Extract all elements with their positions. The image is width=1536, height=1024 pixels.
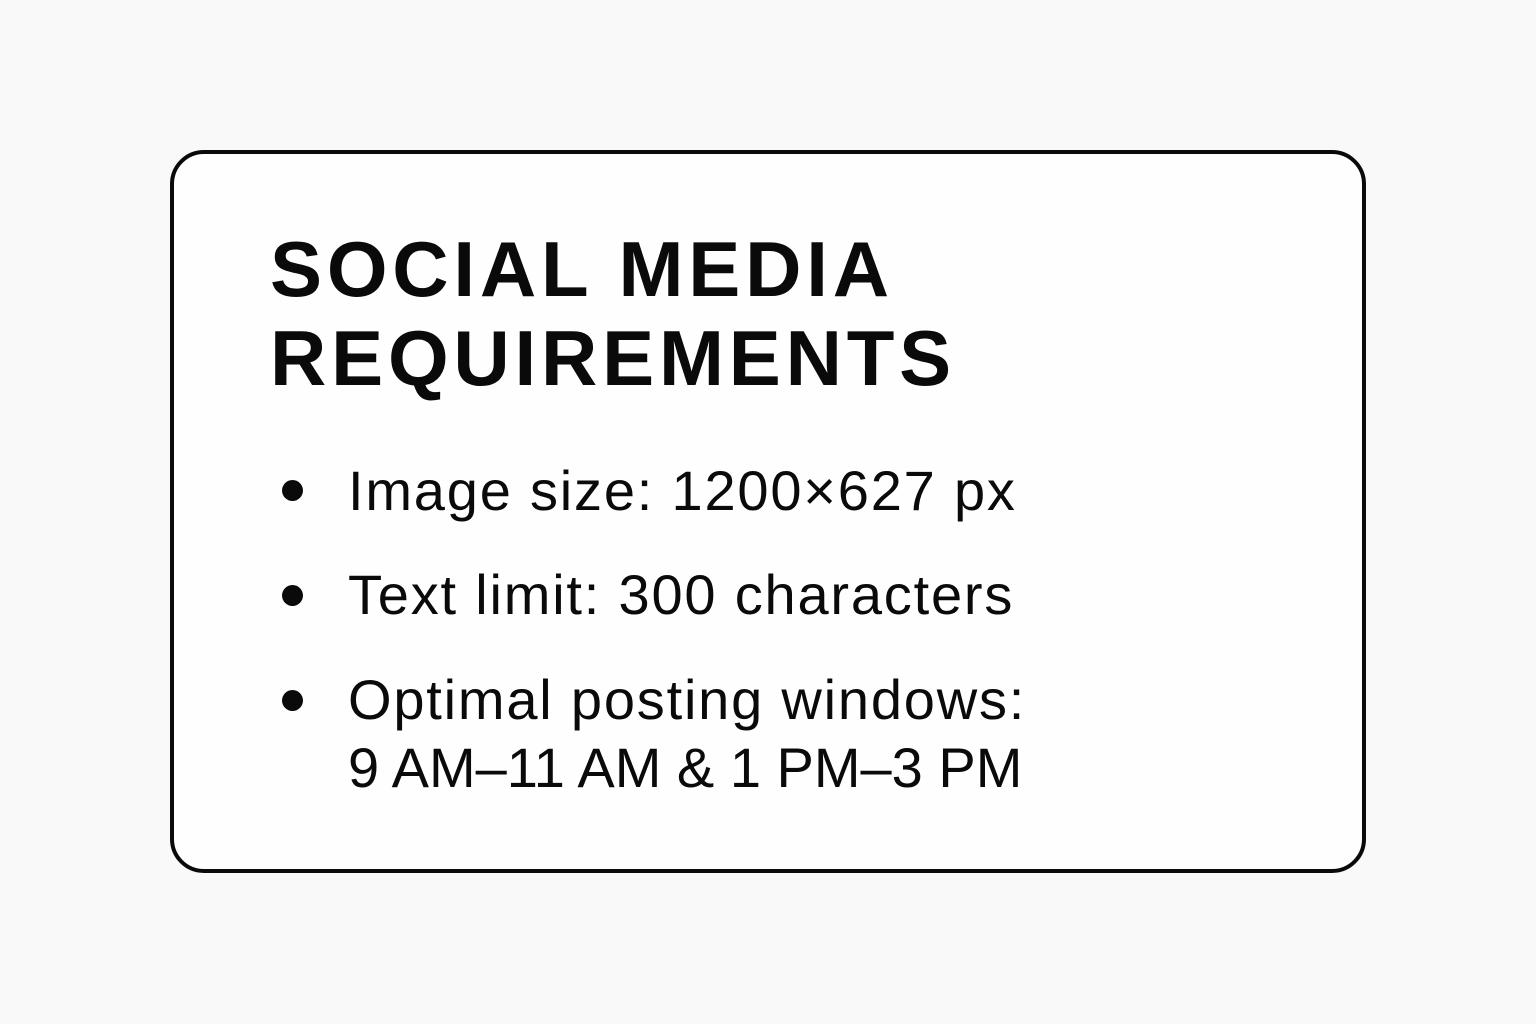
bullet: text limit — [282, 585, 303, 606]
text: posting windows — [348, 668, 1026, 799]
title: SOCIAL MEDIA — [270, 225, 894, 313]
title — [270, 225, 956, 402]
text: image size: Image size: 1200×627 px — [348, 459, 1017, 522]
text: text limit: Text limit: 300 characters — [348, 563, 1014, 626]
title: REQUIREMENTS — [270, 314, 956, 402]
panel: requirements card — [170, 150, 1366, 873]
bullet: image size — [282, 480, 303, 501]
bullet: posting windows — [282, 690, 303, 711]
text: posting windows: Optimal posting windows: — [348, 668, 1026, 731]
text: posting windows: 9 AM–11 AM & 1 PM–3 PM — [348, 736, 1022, 799]
